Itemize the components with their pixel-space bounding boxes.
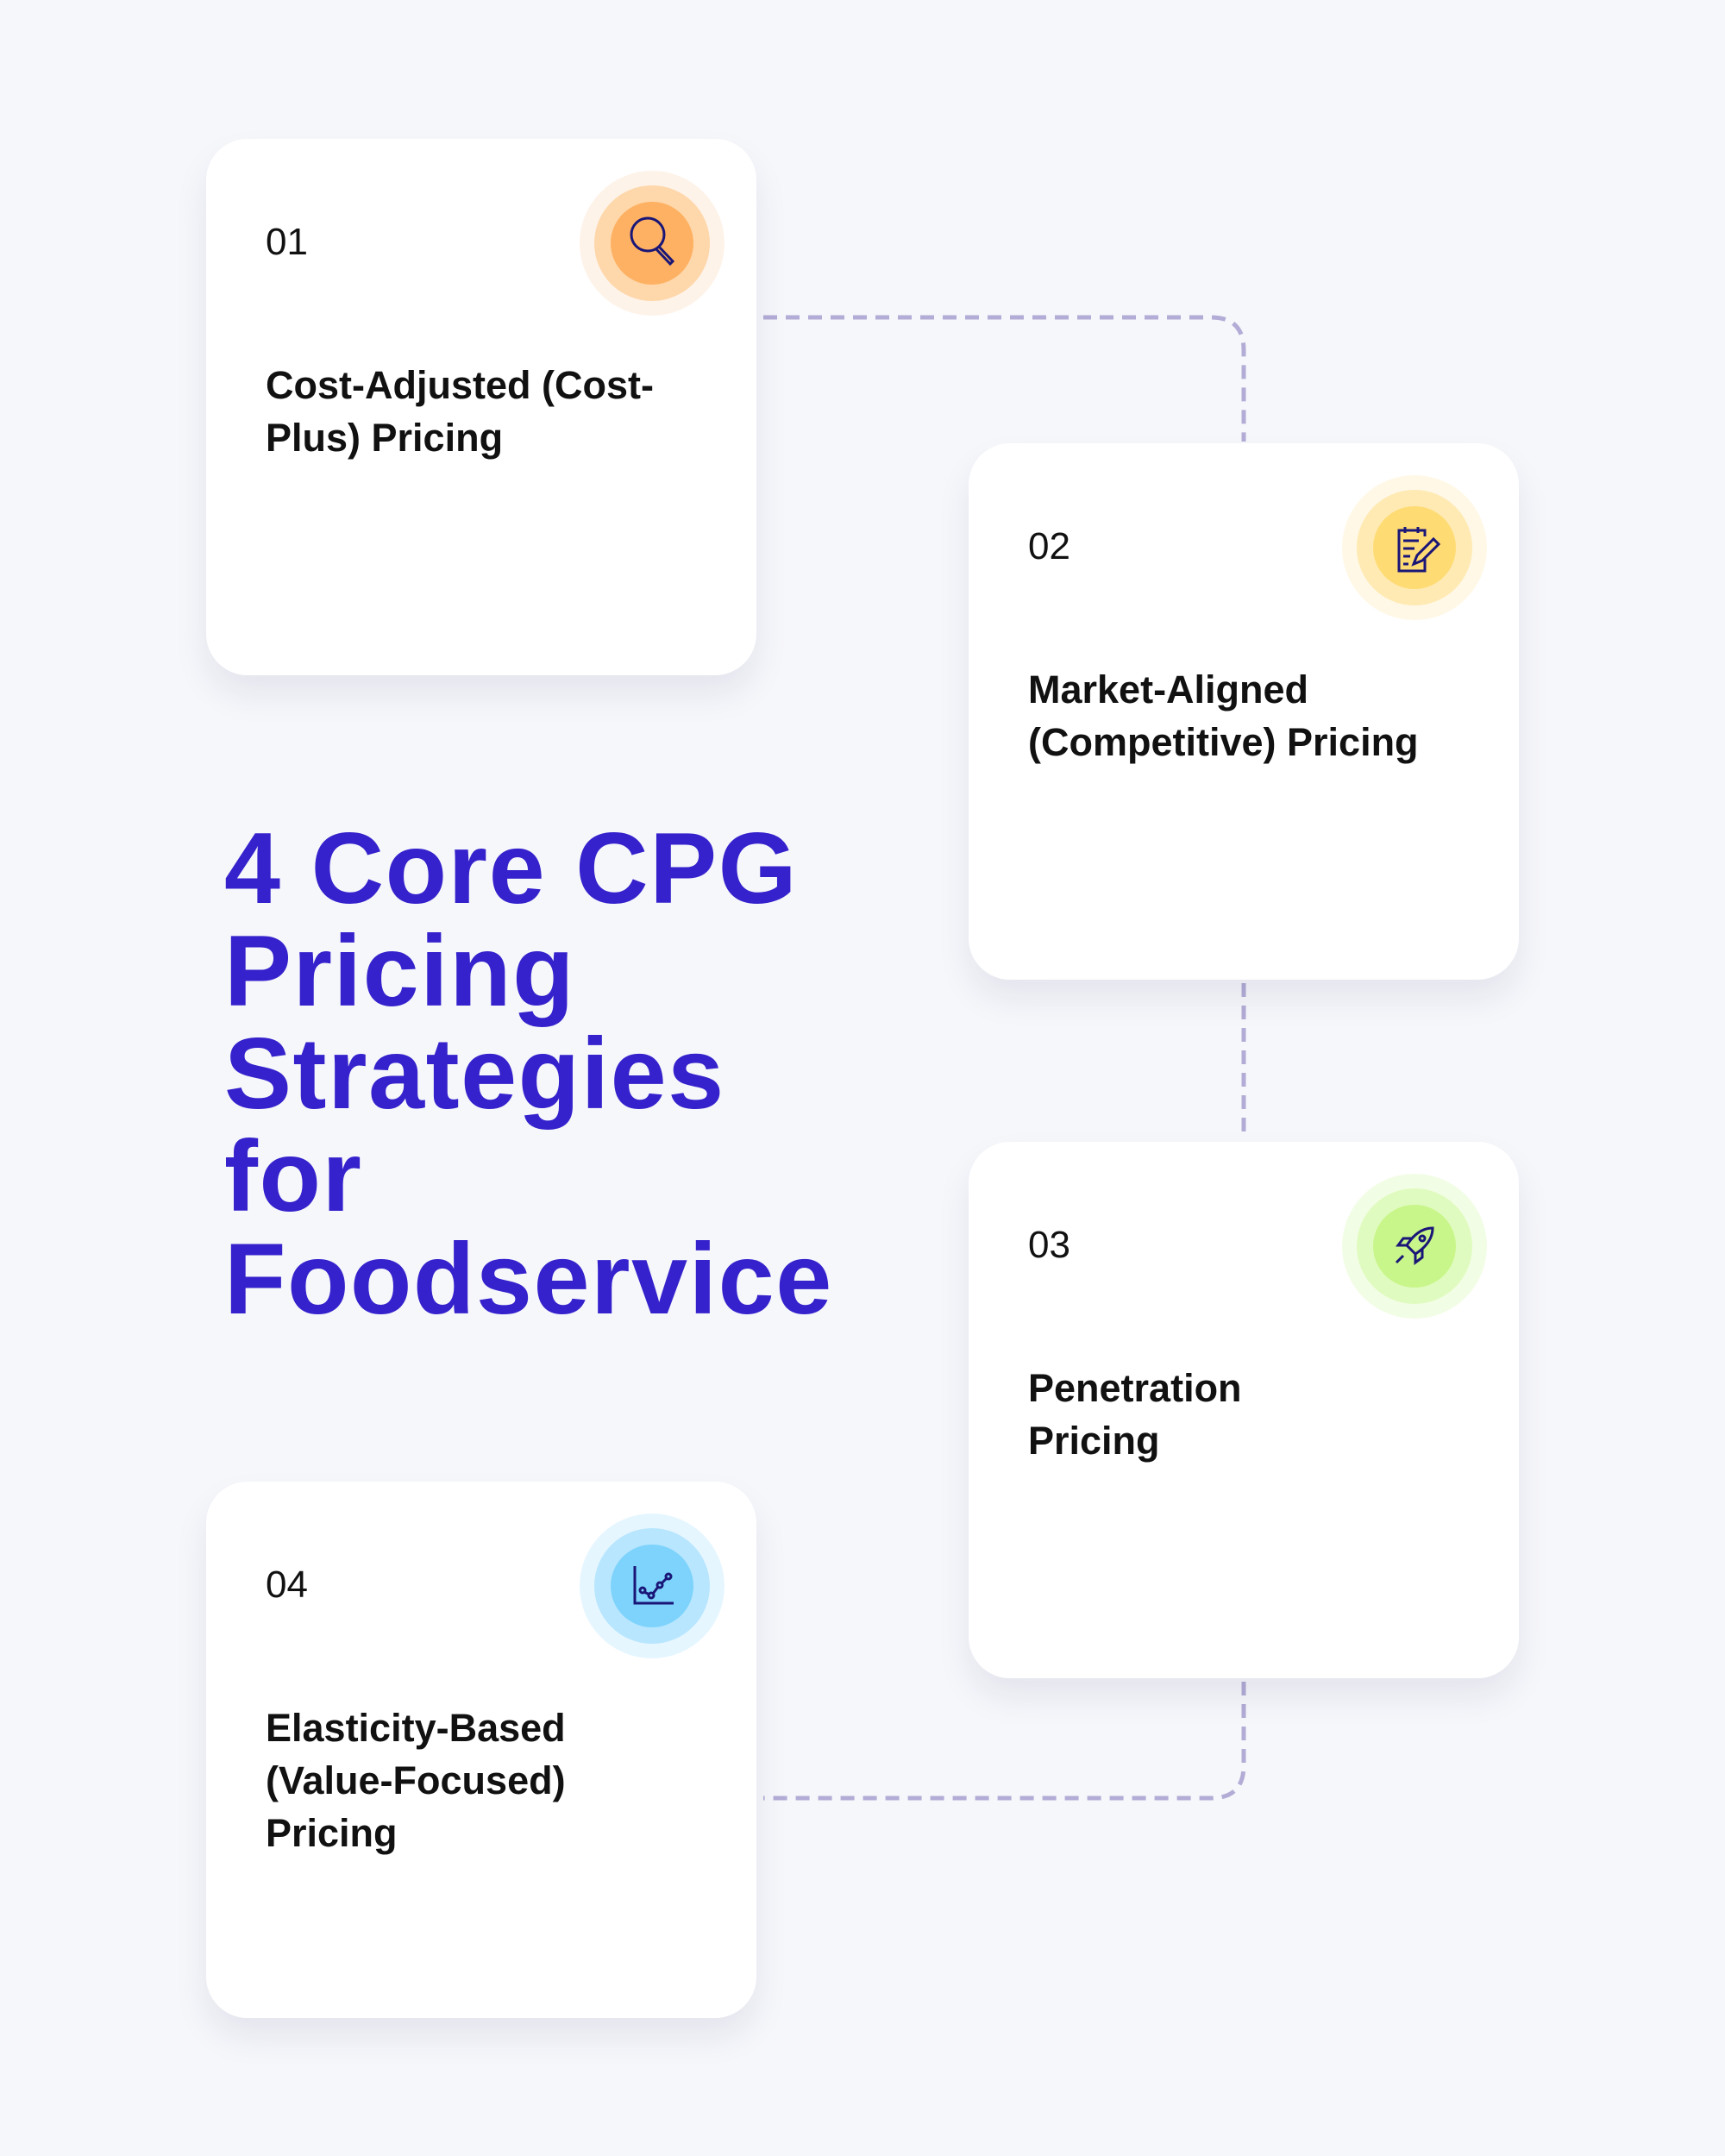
title 02 (1028, 667, 1419, 764)
title 02: Market-Aligned (1028, 667, 1308, 711)
title 03: Penetration (1028, 1366, 1242, 1410)
icon: magnifier (580, 171, 724, 316)
card 01 (206, 139, 756, 675)
title: 4 Core CPG (224, 812, 798, 924)
title: Pricing (224, 914, 575, 1027)
card 03: 03 (1028, 1224, 1070, 1266)
card 02: 02 (1028, 525, 1070, 567)
title: Strategies (224, 1017, 725, 1130)
card 02 (969, 443, 1519, 980)
icon: notepad (1342, 475, 1487, 620)
title: for (224, 1119, 362, 1232)
icon: chart (580, 1514, 724, 1658)
title: Foodservice (224, 1222, 833, 1335)
card 03 (969, 1142, 1519, 1678)
title 04 (266, 1706, 566, 1855)
title 01: Cost-Adjusted (Cost- (266, 363, 654, 407)
card 04: 04 (266, 1564, 308, 1606)
title 01: Plus) Pricing (266, 416, 503, 460)
title 04: (Value-Focused) (266, 1758, 566, 1802)
title 03 (1028, 1366, 1242, 1463)
icon: rocket (1342, 1174, 1487, 1319)
title 04: Elasticity-Based (266, 1706, 566, 1750)
card 04 (206, 1482, 756, 2018)
card 01: 01 (266, 221, 308, 263)
title 02: (Competitive) Pricing (1028, 720, 1419, 764)
title 03: Pricing (1028, 1419, 1160, 1463)
title 01 (266, 363, 654, 460)
title 04: Pricing (266, 1811, 398, 1855)
title (224, 812, 833, 1335)
